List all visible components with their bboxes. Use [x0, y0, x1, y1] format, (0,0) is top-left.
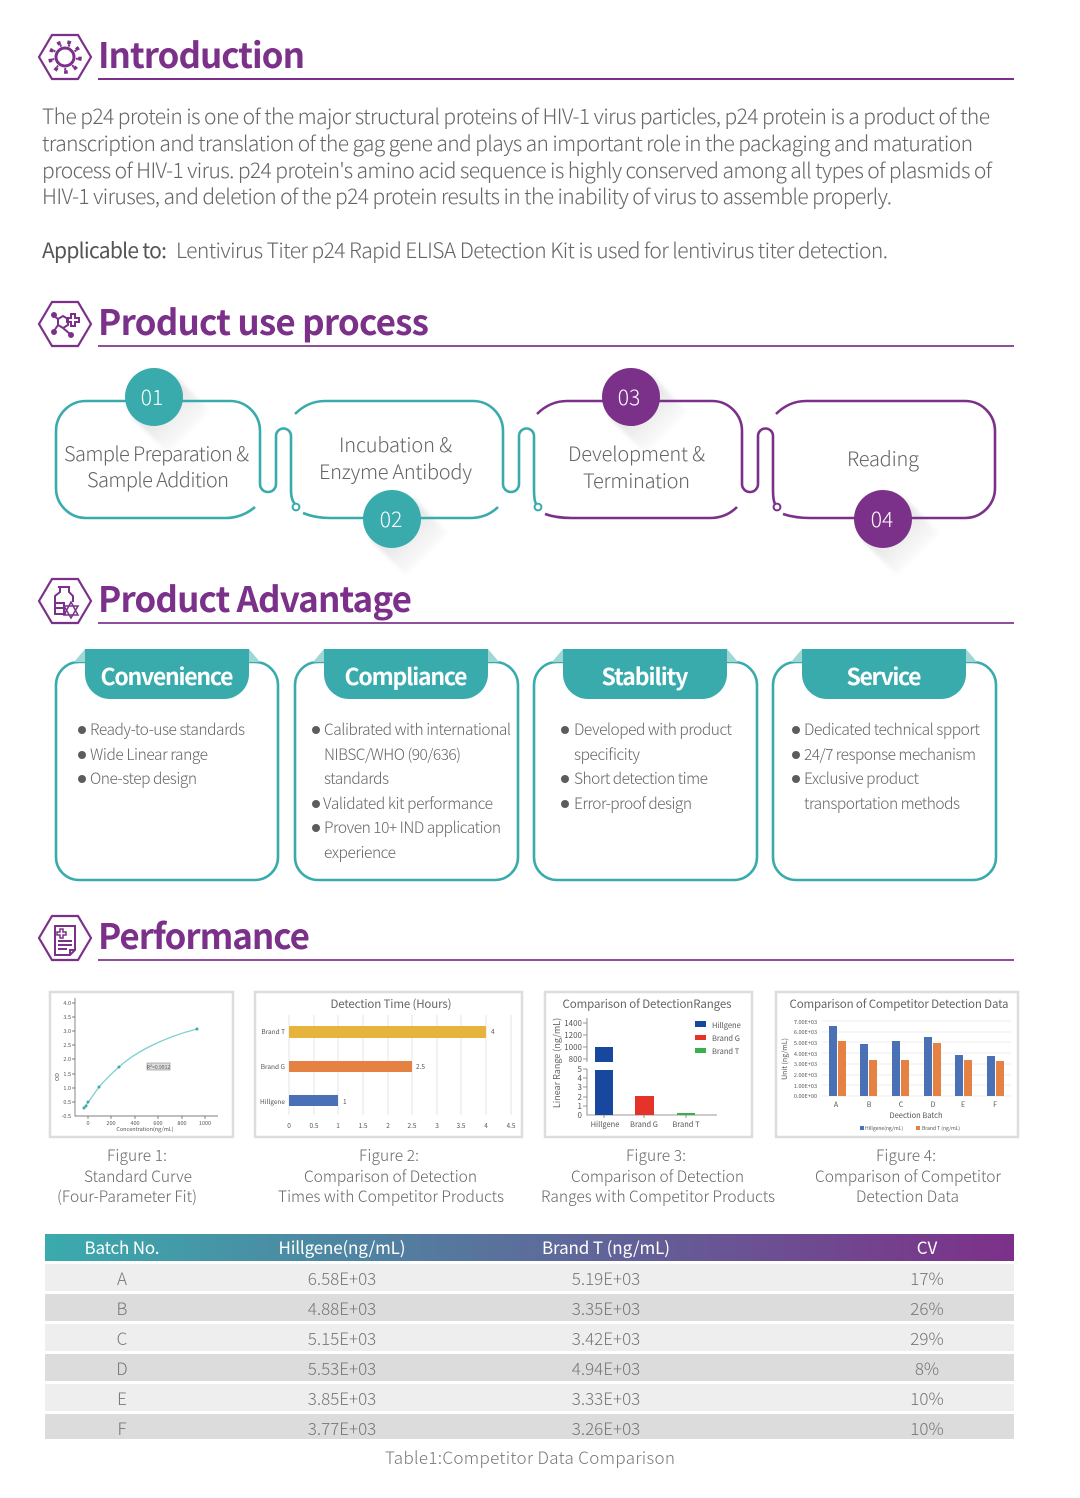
chart: detection time: Detection Time (Hours) — [330, 996, 452, 1012]
table rows: A — [117, 1265, 127, 1290]
chart: competitor detection data: B — [867, 1100, 872, 1110]
panel: Stability: Error-proof design — [574, 792, 692, 814]
chart: standard curve: 0.5 — [63, 1098, 71, 1106]
caption: figure 3: Comparison of Detection — [571, 1165, 744, 1187]
caption: figure 1: Standard Curve — [84, 1165, 192, 1187]
chart: detection ranges: 2 — [578, 1092, 583, 1103]
heading: Product use process — [39, 295, 1014, 346]
process flow — [56, 368, 995, 575]
chart: standard curve: 200 — [106, 1119, 116, 1127]
chart: detection ranges: Brand G — [630, 1119, 658, 1130]
chart: detection ranges: 1400 — [564, 1018, 583, 1029]
table rows: 5.19E+03 — [572, 1265, 640, 1290]
panel: Convenience: Convenience — [100, 658, 234, 692]
chart: standard curve — [50, 992, 233, 1137]
step 1: sample preparation: Sample Preparation & — [64, 438, 249, 467]
caption: table 1: Table1:Competitor Data Comparison — [385, 1444, 675, 1469]
panel: Service: 24/7 response mechanism — [804, 743, 976, 765]
chart: detection time: 0 — [287, 1120, 291, 1130]
chart: detection time: 4.5 — [506, 1120, 516, 1130]
table rows: C — [117, 1325, 127, 1350]
chart: detection time: 1 — [343, 1096, 347, 1106]
table rows: 10% — [910, 1415, 944, 1440]
text block: introduction paragraph: HIV-1 viruses, and deletion of the p24 protein results in the inability of virus to assemble properly. — [42, 181, 892, 211]
chart: standard curve: Concentration(ng/mL) — [116, 1125, 174, 1133]
step 1: sample preparation: 01 — [141, 382, 163, 412]
table rows: 3.42E+03 — [572, 1325, 640, 1350]
chart: standard curve: 0 — [86, 1119, 90, 1127]
chart: detection ranges: Hillgene — [591, 1119, 619, 1130]
table header: Batch No. — [84, 1234, 160, 1259]
chart: detection ranges: Brand G — [712, 1033, 740, 1044]
chart: detection time: 1 — [336, 1120, 340, 1130]
chart: standard curve: OD — [53, 1073, 61, 1081]
caption: figure 2: Times with Competitor Products — [278, 1185, 504, 1207]
panel: Compliance: Compliance — [344, 658, 468, 692]
chart: standard curve: 2.5 — [63, 1041, 71, 1049]
table rows: 4.88E+03 — [308, 1295, 376, 1320]
chart: detection ranges: Linear Range (ng/mL) — [550, 1018, 563, 1108]
chart: detection time: 0.5 — [309, 1120, 319, 1130]
chart: detection time — [255, 992, 522, 1137]
caption: figure 4 — [815, 1144, 1001, 1207]
chart: detection time: 4 — [491, 1026, 495, 1036]
caption: figure 4: Comparison of Competitor — [815, 1165, 1001, 1187]
chart: detection time: Brand T — [261, 1026, 285, 1036]
table rows: 3.77E+03 — [308, 1415, 376, 1440]
chart: detection ranges: Comparison of DetectionRanges — [562, 996, 732, 1012]
chart: standard curve: 1000 — [199, 1119, 211, 1127]
panel: Stability: Developed with product — [574, 718, 733, 740]
panel: Compliance: standards — [324, 767, 389, 789]
chart: detection time: 2.5 — [416, 1061, 425, 1071]
chart: competitor detection data: Comparison of Competitor Detection Data — [790, 996, 1008, 1012]
heading: Product Advantage — [39, 572, 1014, 623]
chart: detection time: 2.5 — [407, 1120, 417, 1130]
table header — [45, 1234, 1014, 1261]
text block: applicable to: Lentivirus Titer p24 Rapid ELISA Detection Kit is used for lentivirus titer detection. — [176, 235, 888, 265]
chart: detection ranges — [545, 992, 752, 1137]
panel: Compliance: experience — [324, 841, 396, 863]
table rows: 5.53E+03 — [308, 1355, 376, 1380]
step 4: reading: 04 — [871, 504, 893, 534]
title: Introduction: Introduction — [98, 28, 305, 79]
table rows: 4.94E+03 — [572, 1355, 640, 1380]
chart: competitor detection data: 3.00E+03 — [794, 1060, 817, 1068]
chart: detection time: 3.5 — [456, 1120, 466, 1130]
step 2: incubation — [295, 401, 541, 575]
caption: figure 3: Figure 3: — [626, 1144, 686, 1166]
step 3: development: Development & — [568, 438, 705, 467]
chart: competitor detection data: A — [834, 1100, 839, 1110]
chart: standard curve: R²=0.9912 — [147, 1064, 170, 1071]
step 2: incubation: Enzyme Antibody — [319, 456, 472, 485]
table rows — [45, 1264, 1014, 1440]
chart: competitor detection data: 1.00E+03 — [794, 1082, 817, 1090]
panel: Stability: Stability — [602, 658, 688, 692]
step 3: development: 03 — [618, 382, 640, 412]
table: competitor data comparison — [45, 1234, 1014, 1440]
table rows: 5.15E+03 — [308, 1325, 376, 1350]
panel: Compliance — [295, 649, 518, 880]
chart: detection ranges: 1 — [578, 1101, 582, 1112]
table header: Hillgene(ng/mL) — [278, 1234, 406, 1259]
caption: figure 3 — [541, 1144, 775, 1207]
table rows: D — [116, 1355, 128, 1380]
chart: competitor detection data: Unit (ng/mL) — [780, 1038, 790, 1080]
chart: standard curve: -0.5 — [61, 1112, 71, 1120]
chart: detection time: 3 — [435, 1120, 439, 1130]
panel: Compliance: Proven 10+ IND application — [324, 816, 501, 838]
table rows: 29% — [910, 1325, 944, 1350]
caption: figure 1 — [57, 1144, 197, 1207]
step 2: incubation: 02 — [380, 504, 402, 534]
chart: standard curve: 400 — [130, 1119, 140, 1127]
caption: figure 2: Figure 2: — [359, 1144, 419, 1166]
caption: figure 4: Detection Data — [856, 1185, 959, 1207]
chart: competitor detection data — [776, 992, 1018, 1137]
chart: detection time: Hillgene — [260, 1096, 285, 1106]
chart: detection ranges: 1200 — [564, 1030, 583, 1041]
step 3: development — [537, 368, 780, 518]
chart: detection time: 4 — [484, 1120, 488, 1130]
chart: competitor detection data: F — [993, 1100, 997, 1110]
panel: Compliance: NIBSC/WHO (90/636) — [324, 743, 461, 765]
chart: competitor detection data: 2.00E+03 — [794, 1071, 817, 1079]
table rows: 3.33E+03 — [572, 1385, 640, 1410]
text block: applicable to: Applicable to: — [42, 235, 167, 265]
panel: Stability: Short detection time — [574, 767, 708, 789]
title: Product use process: Product use process — [98, 295, 429, 346]
caption: figure 2: Comparison of Detection — [304, 1165, 477, 1187]
chart: competitor detection data: 6.00E+03 — [794, 1028, 817, 1036]
chart: competitor detection data: 0.00E+00 — [794, 1092, 817, 1100]
table rows: B — [117, 1295, 128, 1320]
heading: Introduction — [39, 28, 1014, 79]
panel: Convenience — [56, 649, 278, 880]
icon: molecule in hexagon — [39, 302, 91, 346]
chart: detection ranges: 4 — [578, 1073, 583, 1084]
panel: Compliance: Calibrated with international — [324, 718, 511, 740]
chart: detection ranges: Hillgene — [712, 1020, 741, 1031]
chart: standard curve: 3.0 — [63, 1027, 71, 1035]
step 1: sample preparation: Sample Addition — [87, 464, 229, 493]
caption: figure 1: Figure 1: — [107, 1144, 167, 1166]
chart: competitor detection data: 4.00E+03 — [794, 1050, 817, 1058]
step 2: incubation: Incubation & — [339, 429, 452, 458]
panel: Stability — [534, 649, 757, 880]
caption: figure 4: Figure 4: — [876, 1144, 936, 1166]
panel: Compliance: Validated kit performance — [323, 792, 493, 814]
heading: Performance — [39, 909, 1014, 960]
icon: virus in hexagon — [39, 35, 91, 79]
chart: detection ranges: 1000 — [564, 1042, 583, 1053]
chart: detection ranges: Brand T — [712, 1046, 740, 1057]
step 4: reading — [776, 401, 995, 575]
table rows: 3.35E+03 — [572, 1295, 640, 1320]
chart: detection ranges: 3 — [578, 1082, 582, 1093]
panel: Service: Exclusive product — [804, 767, 920, 789]
chart: detection ranges: Brand T — [672, 1119, 700, 1130]
step 1: sample preparation — [56, 368, 299, 518]
table rows: F — [117, 1415, 127, 1440]
table rows: 8% — [915, 1355, 939, 1380]
chart: competitor detection data: E — [961, 1100, 965, 1110]
chart: competitor detection data: Brand T (ng/mL) — [922, 1125, 960, 1132]
panel: Convenience: Wide Linear range — [90, 743, 208, 765]
text block: introduction paragraph: The p24 protein is one of the major structural proteins of HIV-1 virus particles, p24 protein is a product of the — [42, 101, 990, 131]
table rows: 10% — [910, 1385, 944, 1410]
chart: competitor detection data: 5.00E+03 — [794, 1039, 817, 1047]
table rows: 26% — [910, 1295, 944, 1320]
table rows: 17% — [910, 1265, 944, 1290]
table header: Brand T (ng/mL) — [542, 1234, 670, 1259]
caption: figure 3: Ranges with Competitor Products — [541, 1185, 775, 1207]
chart: detection time: 2 — [386, 1120, 390, 1130]
caption: figure 1: (Four-Parameter Fit) — [57, 1185, 197, 1207]
text block: introduction paragraph: process of HIV-1 virus. p24 protein's amino acid sequence is highly conserved among all types of plasmids of — [42, 155, 993, 185]
chart: detection time: Brand G — [261, 1061, 285, 1071]
step 3: development: Termination — [583, 465, 690, 494]
icon: bottles in hexagon — [39, 579, 91, 623]
chart: standard curve: 3.5 — [63, 1013, 71, 1021]
chart: competitor detection data: C — [899, 1100, 904, 1110]
panel: Service: Dedicated technical spport — [804, 718, 981, 740]
chart: detection ranges: 5 — [578, 1064, 582, 1075]
panel: Service: Service — [846, 658, 922, 692]
chart: standard curve: 2.0 — [63, 1055, 71, 1063]
chart: detection time: 1.5 — [358, 1120, 368, 1130]
chart: standard curve: 600 — [153, 1119, 163, 1127]
title: Performance: Performance — [98, 909, 310, 960]
title: Product Advantage: Product Advantage — [98, 572, 412, 623]
table header: CV — [917, 1234, 937, 1259]
icon: report in hexagon — [39, 916, 91, 960]
table rows: 6.58E+03 — [308, 1265, 376, 1290]
panel: Convenience: Ready-to-use standards — [90, 718, 245, 740]
panel: Convenience: One-step design — [90, 767, 197, 789]
chart: competitor detection data: Hillgene(ng/mL) — [865, 1125, 903, 1132]
text block: introduction paragraph — [42, 101, 993, 211]
step 4: reading: Reading — [847, 443, 919, 472]
panel: Service — [773, 649, 996, 880]
chart: standard curve: 1.5 — [63, 1070, 71, 1078]
panel: Service: transportation methods — [804, 792, 960, 814]
chart: standard curve: 1.0 — [63, 1084, 71, 1092]
table rows: 3.85E+03 — [308, 1385, 376, 1410]
chart: detection ranges: 800 — [569, 1054, 583, 1065]
table rows: 3.26E+03 — [572, 1415, 640, 1440]
chart: competitor detection data: D — [931, 1100, 936, 1110]
table rows: E — [117, 1385, 127, 1410]
chart: detection ranges: 0 — [578, 1110, 583, 1121]
chart: standard curve: 800 — [177, 1119, 187, 1127]
caption: figure 2 — [278, 1144, 504, 1207]
text block: introduction paragraph: transcription and translation of the gag gene and plays an important role in the packaging and maturation — [42, 128, 973, 158]
chart: competitor detection data: 7.00E+03 — [794, 1018, 817, 1026]
chart: standard curve: 4.0 — [63, 999, 71, 1007]
panel: Stability: specificity — [574, 743, 640, 765]
chart: competitor detection data: Deection Batch — [889, 1110, 943, 1121]
